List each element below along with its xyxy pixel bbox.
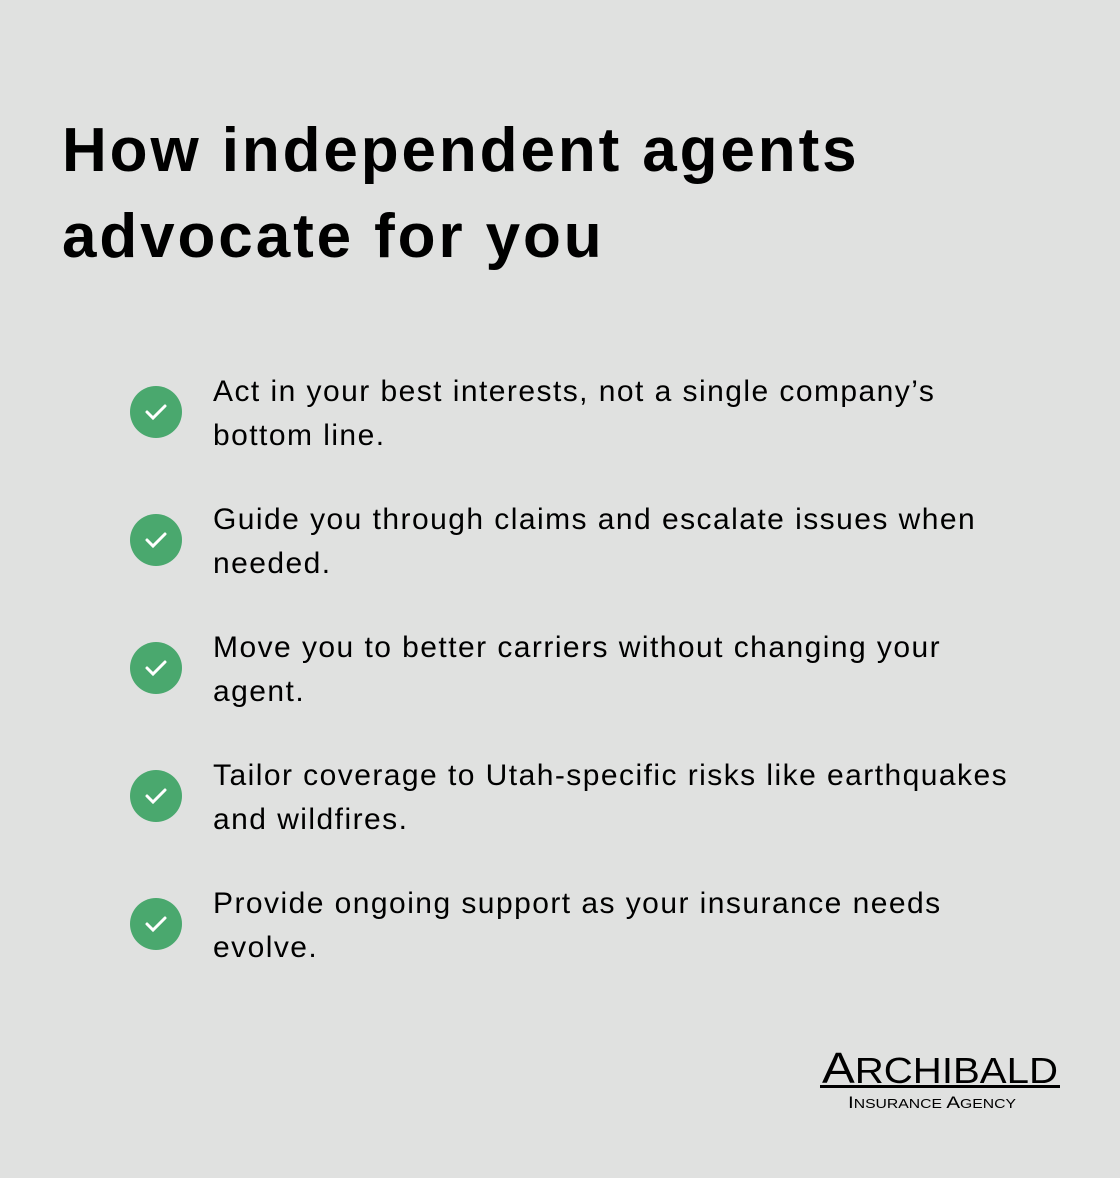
item 1	[130, 375, 935, 452]
logo: INSURANCE AGENCY	[848, 1093, 1016, 1112]
icon: check	[130, 898, 182, 950]
text 4: and wildfires.	[213, 803, 408, 836]
title: How independent agents	[62, 116, 860, 185]
title: advocate for you	[62, 202, 605, 271]
text 2: needed.	[213, 547, 332, 580]
text 1: bottom line.	[213, 419, 385, 452]
icon: check	[130, 770, 182, 822]
text 1	[213, 375, 935, 452]
icon: check	[130, 514, 182, 566]
logo: ARCHIBALD	[822, 1044, 1058, 1093]
item 5	[130, 887, 942, 964]
text 3: agent.	[213, 675, 305, 708]
text 3	[213, 631, 941, 708]
icon: check	[130, 642, 182, 694]
text 2	[213, 503, 976, 580]
item 4	[130, 759, 1008, 836]
title	[62, 116, 860, 271]
text 1: Act in your best interests, not a single company’s	[213, 375, 935, 408]
text 5: evolve.	[213, 931, 318, 964]
text 5: Provide ongoing support as your insurance needs	[213, 887, 942, 920]
text 5	[213, 887, 942, 964]
text 4	[213, 759, 1008, 836]
item 3	[130, 631, 941, 708]
icon: check	[130, 386, 182, 438]
item 2	[130, 503, 976, 580]
text 3: Move you to better carriers without changing your	[213, 631, 941, 664]
text 2: Guide you through claims and escalate issues when	[213, 503, 976, 536]
logo	[820, 1044, 1060, 1112]
text 4: Tailor coverage to Utah-specific risks like earthquakes	[213, 759, 1008, 792]
